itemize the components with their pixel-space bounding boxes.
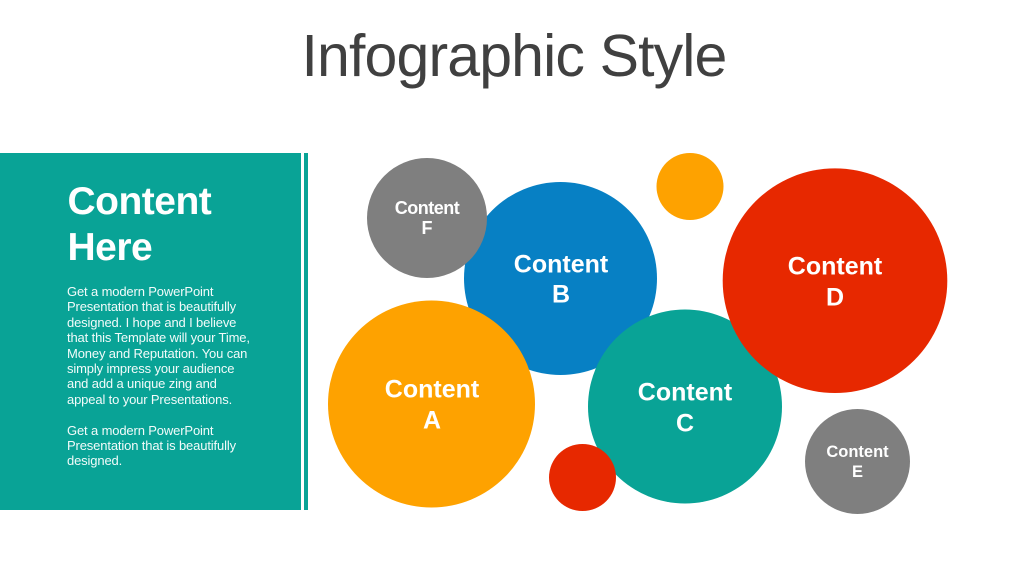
bubble D (723, 168, 947, 393)
panel body text: Money and Reputation. You can (67, 346, 247, 361)
bubble C: C (676, 410, 694, 438)
bubble D: Content (788, 252, 883, 280)
decorative orange circle (656, 153, 724, 220)
panel body text: appeal to your Presentations. (67, 392, 232, 407)
bubble F (367, 158, 487, 278)
panel accent stripe (304, 153, 308, 510)
panel: content here (0, 153, 308, 510)
bubble E: Content (826, 443, 889, 461)
bubble E: E (852, 463, 863, 481)
panel body text: designed. I hope and I believe (67, 315, 236, 330)
panel body text: Presentation that is beautifully (67, 438, 236, 453)
panel body text: and add a unique zing and (67, 376, 217, 391)
panel heading (68, 180, 212, 269)
panel body text (67, 284, 250, 468)
panel body text: that this Template will your Time, (67, 330, 250, 345)
panel body text: simply impress your audience (67, 361, 234, 376)
bubble B: B (552, 280, 570, 308)
bubble B (464, 182, 657, 375)
bubble A (328, 300, 535, 508)
bubble F: F (422, 218, 432, 238)
panel body text: Get a modern PowerPoint (67, 423, 213, 438)
panel body text: Presentation that is beautifully (67, 299, 236, 314)
panel heading: Here (68, 226, 152, 269)
panel heading: Content (68, 180, 211, 223)
bubble C (588, 310, 782, 504)
bubble C: Content (638, 378, 733, 406)
decorative red circle (549, 444, 616, 511)
bubble E (805, 409, 910, 514)
panel body text: Get a modern PowerPoint (67, 284, 213, 299)
bubble F: Content (395, 198, 460, 218)
title: Infographic Style (301, 23, 727, 89)
bubble D: D (826, 284, 844, 312)
bubble B: Content (514, 250, 609, 278)
panel background (0, 153, 301, 510)
bubble A: Content (385, 376, 480, 404)
panel body text: designed. (67, 453, 122, 468)
bubble A: A (423, 406, 441, 434)
